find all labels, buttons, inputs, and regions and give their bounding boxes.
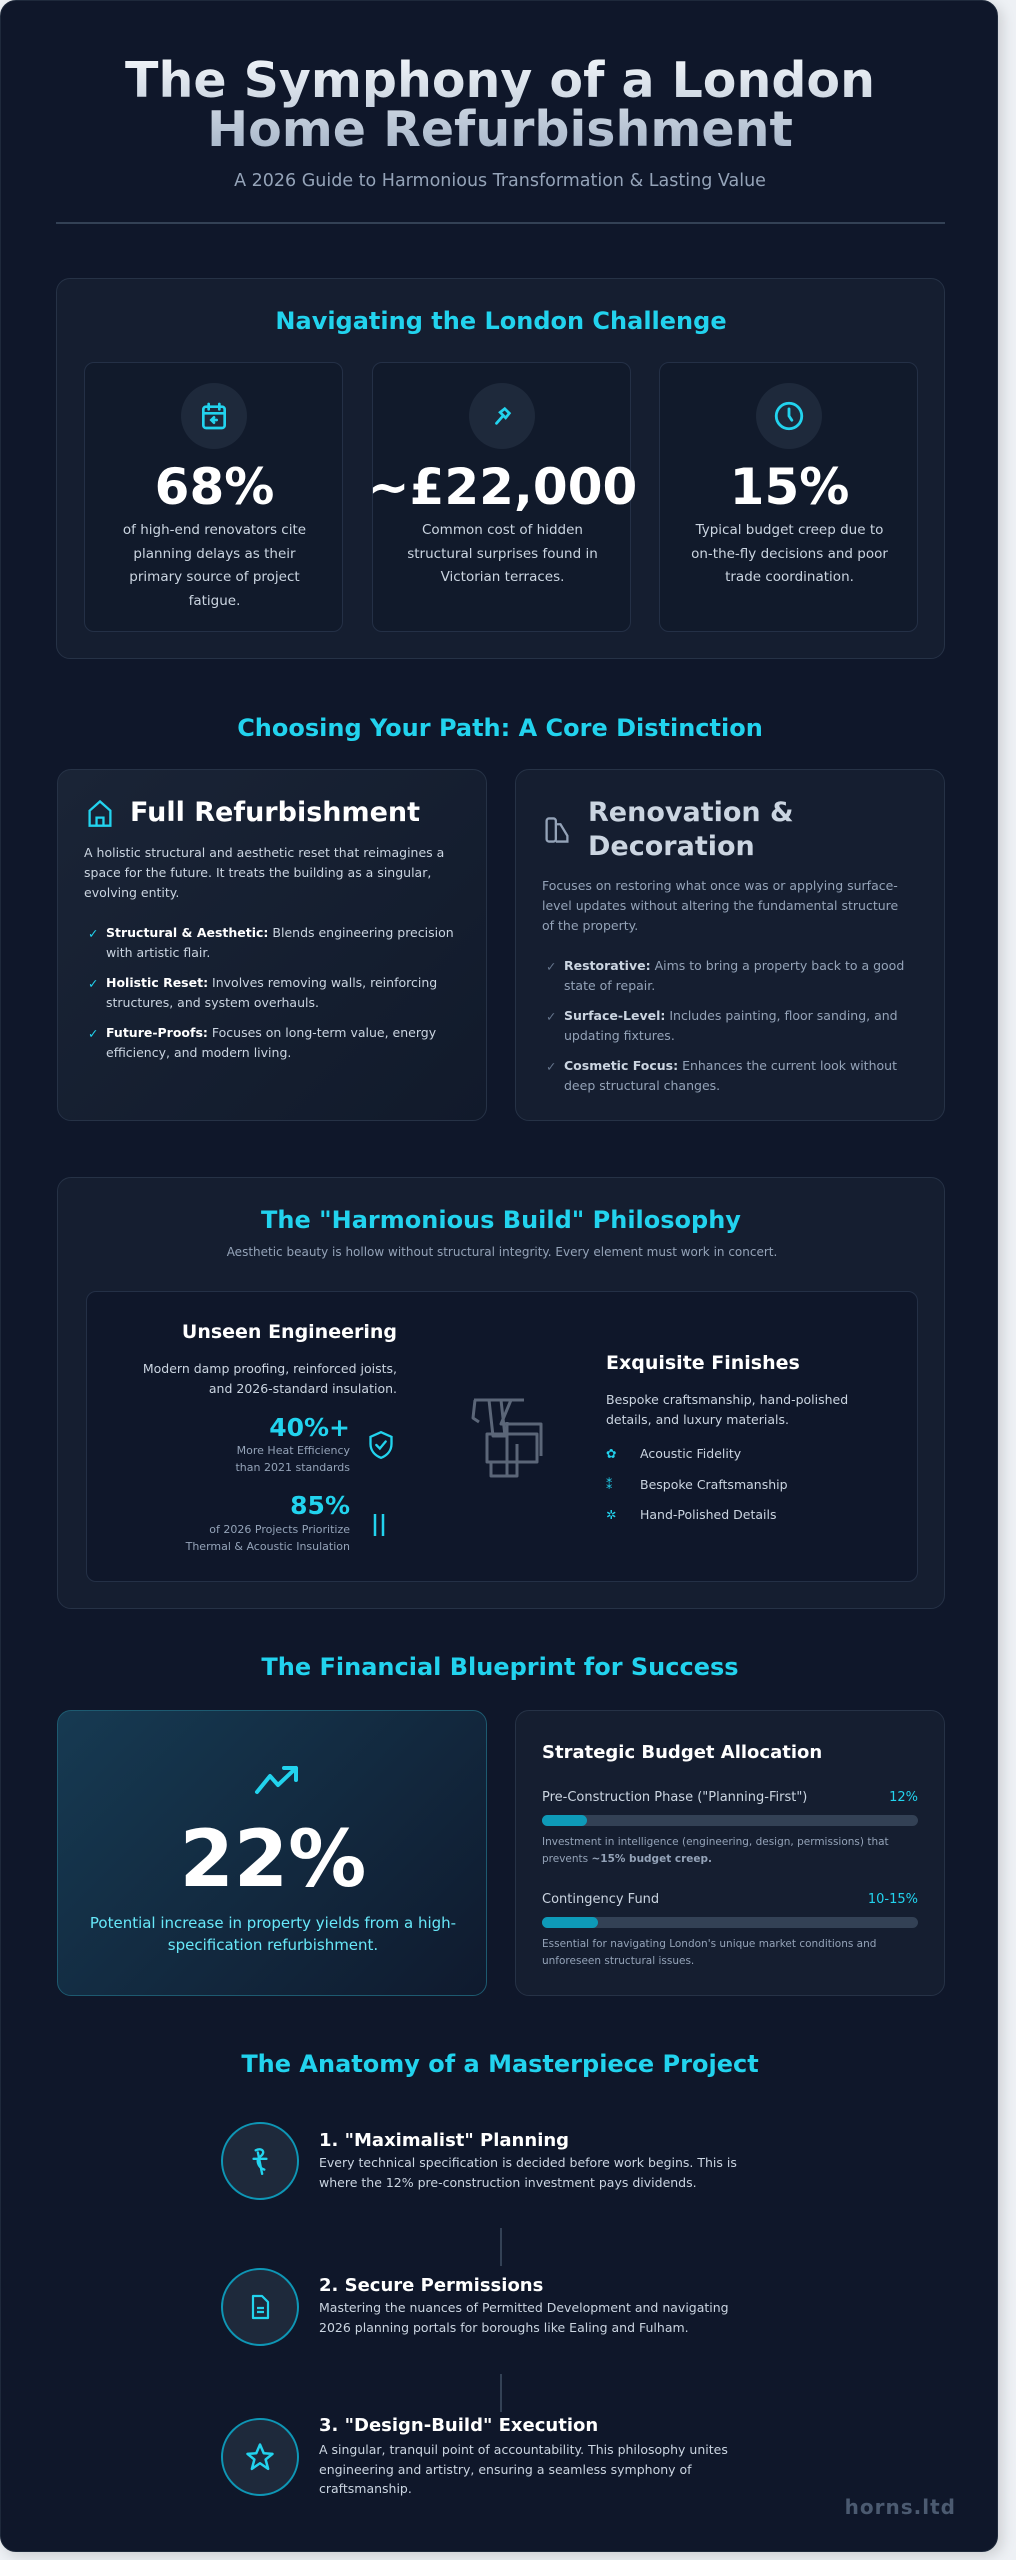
icon: bars	[374, 1514, 384, 1536]
list: renovation points: Surface-Level: Includes painting, floor sanding, and updating fixtures.	[564, 1008, 898, 1043]
list: finishes: ⁑	[606, 1476, 612, 1492]
bar: pre-construction: Pre-Construction Phase ("Planning-First")	[542, 1790, 807, 1805]
stat: 15%: 15%	[730, 458, 849, 516]
step 3	[221, 2415, 728, 2496]
heading: renovation	[588, 797, 794, 862]
stat: 85%: Thermal & Acoustic Insulation	[186, 1540, 350, 1553]
stat: 40%: More Heat Efficiency	[237, 1444, 350, 1457]
heading: exquisite finishes: Exquisite Finishes	[606, 1352, 800, 1374]
stat: 22000: ~£22,000	[368, 458, 637, 516]
panel: 22% yield	[57, 1710, 487, 1996]
list: full refurbishment points: Future-Proofs: Focuses on long-term value, energy efficiency, and modern living.	[106, 1025, 436, 1060]
heading: financial blueprint: The Financial Blueprint for Success	[261, 1653, 739, 1681]
heading: challenge: Navigating the London Challenge	[275, 307, 727, 335]
heading: renovation: Renovation &	[588, 797, 794, 828]
list: renovation points: ✓	[546, 959, 556, 974]
heading: core distinction: Choosing Your Path: A Core Distinction	[237, 714, 763, 742]
step 3: 3. "Design-Build" Execution	[319, 2415, 598, 2436]
title	[1, 56, 999, 154]
heading: unseen engineering: Unseen Engineering	[182, 1321, 397, 1343]
title: The Symphony of a London	[125, 52, 875, 109]
stat: 85%: of 2026 Projects Prioritize	[209, 1523, 350, 1536]
text: finishes desc: Bespoke craftsmanship, hand-polished details, and luxury materials.	[606, 1392, 848, 1427]
step 2: 2. Secure Permissions	[319, 2275, 543, 2296]
list: full refurbishment points: ✓	[88, 976, 98, 991]
list: full refurbishment points: Structural & Aesthetic: Blends engineering precision with artistic flair.	[106, 925, 454, 960]
stat: 15%: Typical budget creep due to on-the-fly decisions and poor trade coordination.	[691, 522, 888, 585]
stat: 22000: Common cost of hidden structural surprises found in Victorian terraces.	[407, 522, 598, 585]
text: engineering desc: Modern damp proofing, reinforced joists, and 2026-standard insulation.	[143, 1361, 397, 1396]
bar: pre-construction	[542, 1790, 918, 1865]
bar: contingency: Contingency Fund	[542, 1892, 659, 1907]
subtitle: A 2026 Guide to Harmonious Transformation & Lasting Value	[234, 171, 766, 191]
icon: clock	[756, 383, 822, 449]
stat: 68%: 68%	[155, 458, 274, 516]
icon: hammer	[469, 383, 535, 449]
list: finishes	[606, 1446, 788, 1522]
list: full refurbishment points: ✓	[88, 926, 98, 941]
list: finishes: Bespoke Craftsmanship	[640, 1476, 788, 1492]
panel: full refurbishment	[57, 769, 487, 1121]
step 1: 1. "Maximalist" Planning	[319, 2130, 569, 2151]
heading: anatomy: The Anatomy of a Masterpiece Project	[241, 2050, 759, 2078]
step 1	[221, 2122, 737, 2200]
step 1: Every technical specification is decided before work begins. This is where the 12% pre-construction investment pays dividends.	[319, 2155, 737, 2190]
text: full refurbishment desc: A holistic structural and aesthetic reset that reimagines a space for the future. It treats the building as a singular, evolving entity.	[84, 845, 444, 900]
list: renovation points: Cosmetic Focus: Enhances the current look without deep structural changes.	[564, 1058, 897, 1093]
heading: budget: Strategic Budget Allocation	[542, 1742, 822, 1763]
list: finishes: Acoustic Fidelity	[640, 1446, 741, 1461]
list: renovation points: ✓	[546, 1009, 556, 1024]
list: finishes: Hand-Polished Details	[640, 1507, 776, 1522]
icon: document	[221, 2268, 299, 2346]
bar: pre-construction: 12%	[889, 1790, 918, 1805]
stat: 85%: 85%	[290, 1491, 350, 1520]
list: finishes: ✲	[606, 1507, 616, 1522]
icon: central scribble	[472, 1398, 542, 1478]
stat: 68%: of high-end renovators cite planning delays as their primary source of project fatigue.	[123, 522, 306, 608]
stat: 22%: 22%	[180, 1815, 366, 1905]
list: full refurbishment points: Holistic Reset: Involves removing walls, reinforcing structures, and system overhauls.	[106, 975, 437, 1010]
icon: step 1	[221, 2122, 299, 2200]
panel: budget allocation	[515, 1710, 945, 1996]
panel: London challenge	[56, 278, 945, 659]
heading: full refurbishment: Full Refurbishment	[130, 797, 420, 828]
stat: 40%: 40%+	[269, 1413, 350, 1442]
inner box	[86, 1291, 918, 1582]
list: renovation points	[546, 958, 904, 1093]
stat: 40%: than 2021 standards	[235, 1461, 350, 1474]
panel: harmonious build	[57, 1177, 945, 1609]
stat: 68%	[84, 362, 343, 632]
icon: calendar	[181, 383, 247, 449]
connector 2	[500, 2374, 502, 2412]
heading: renovation: Decoration	[588, 831, 755, 862]
list: full refurbishment points	[88, 925, 454, 1060]
stat: 40%	[235, 1413, 350, 1474]
stat: 15%	[659, 362, 918, 632]
step 2: Mastering the nuances of Permitted Development and navigating 2026 planning portals for boroughs like Ealing and Fulham.	[319, 2300, 729, 2334]
list: renovation points: ✓	[546, 1059, 556, 1074]
text: renovation desc: Focuses on restoring what once was or applying surface-level updates without altering the fundamental structure of the property.	[542, 878, 898, 933]
list: renovation points: Restorative: Aims to bring a property back to a good state of repair.	[564, 958, 904, 993]
text: philosophy subtitle: Aesthetic beauty is hollow without structural integrity. Every element must work in concert.	[227, 1245, 777, 1259]
bar: contingency	[542, 1892, 918, 1967]
heading: harmonious build: The "Harmonious Build" Philosophy	[261, 1206, 741, 1234]
step 3: A singular, tranquil point of accountability. This philosophy unites engineering and artistry, ensuring a seamless symphony of craftsmanship.	[319, 2442, 728, 2496]
bar: pre-construction: Investment in intelligence (engineering, design, permissions) that prevents ~15% budget creep.	[542, 1836, 889, 1865]
icon: star	[221, 2418, 299, 2496]
step 2	[221, 2268, 729, 2346]
list: full refurbishment points: ✓	[88, 1026, 98, 1041]
title: Home Refurbishment	[207, 101, 793, 158]
bar: contingency: 10-15%	[868, 1892, 918, 1907]
icon: paint	[545, 817, 569, 843]
icon: trend	[254, 1766, 298, 1794]
panel: renovation & decoration	[515, 769, 945, 1121]
connector 1	[500, 2228, 502, 2266]
icon: shield	[369, 1430, 393, 1460]
stat: 85%	[186, 1491, 350, 1553]
bar: contingency: Essential for navigating London's unique market conditions and unforeseen structural issues.	[542, 1938, 876, 1967]
list: finishes: ✿	[606, 1446, 616, 1461]
text: yield caption: Potential increase in property yields from a high-specification refurbishment.	[90, 1914, 456, 1954]
stat: 22000	[372, 362, 631, 632]
icon: house	[88, 800, 112, 827]
watermark: horns.ltd	[845, 2495, 956, 2519]
